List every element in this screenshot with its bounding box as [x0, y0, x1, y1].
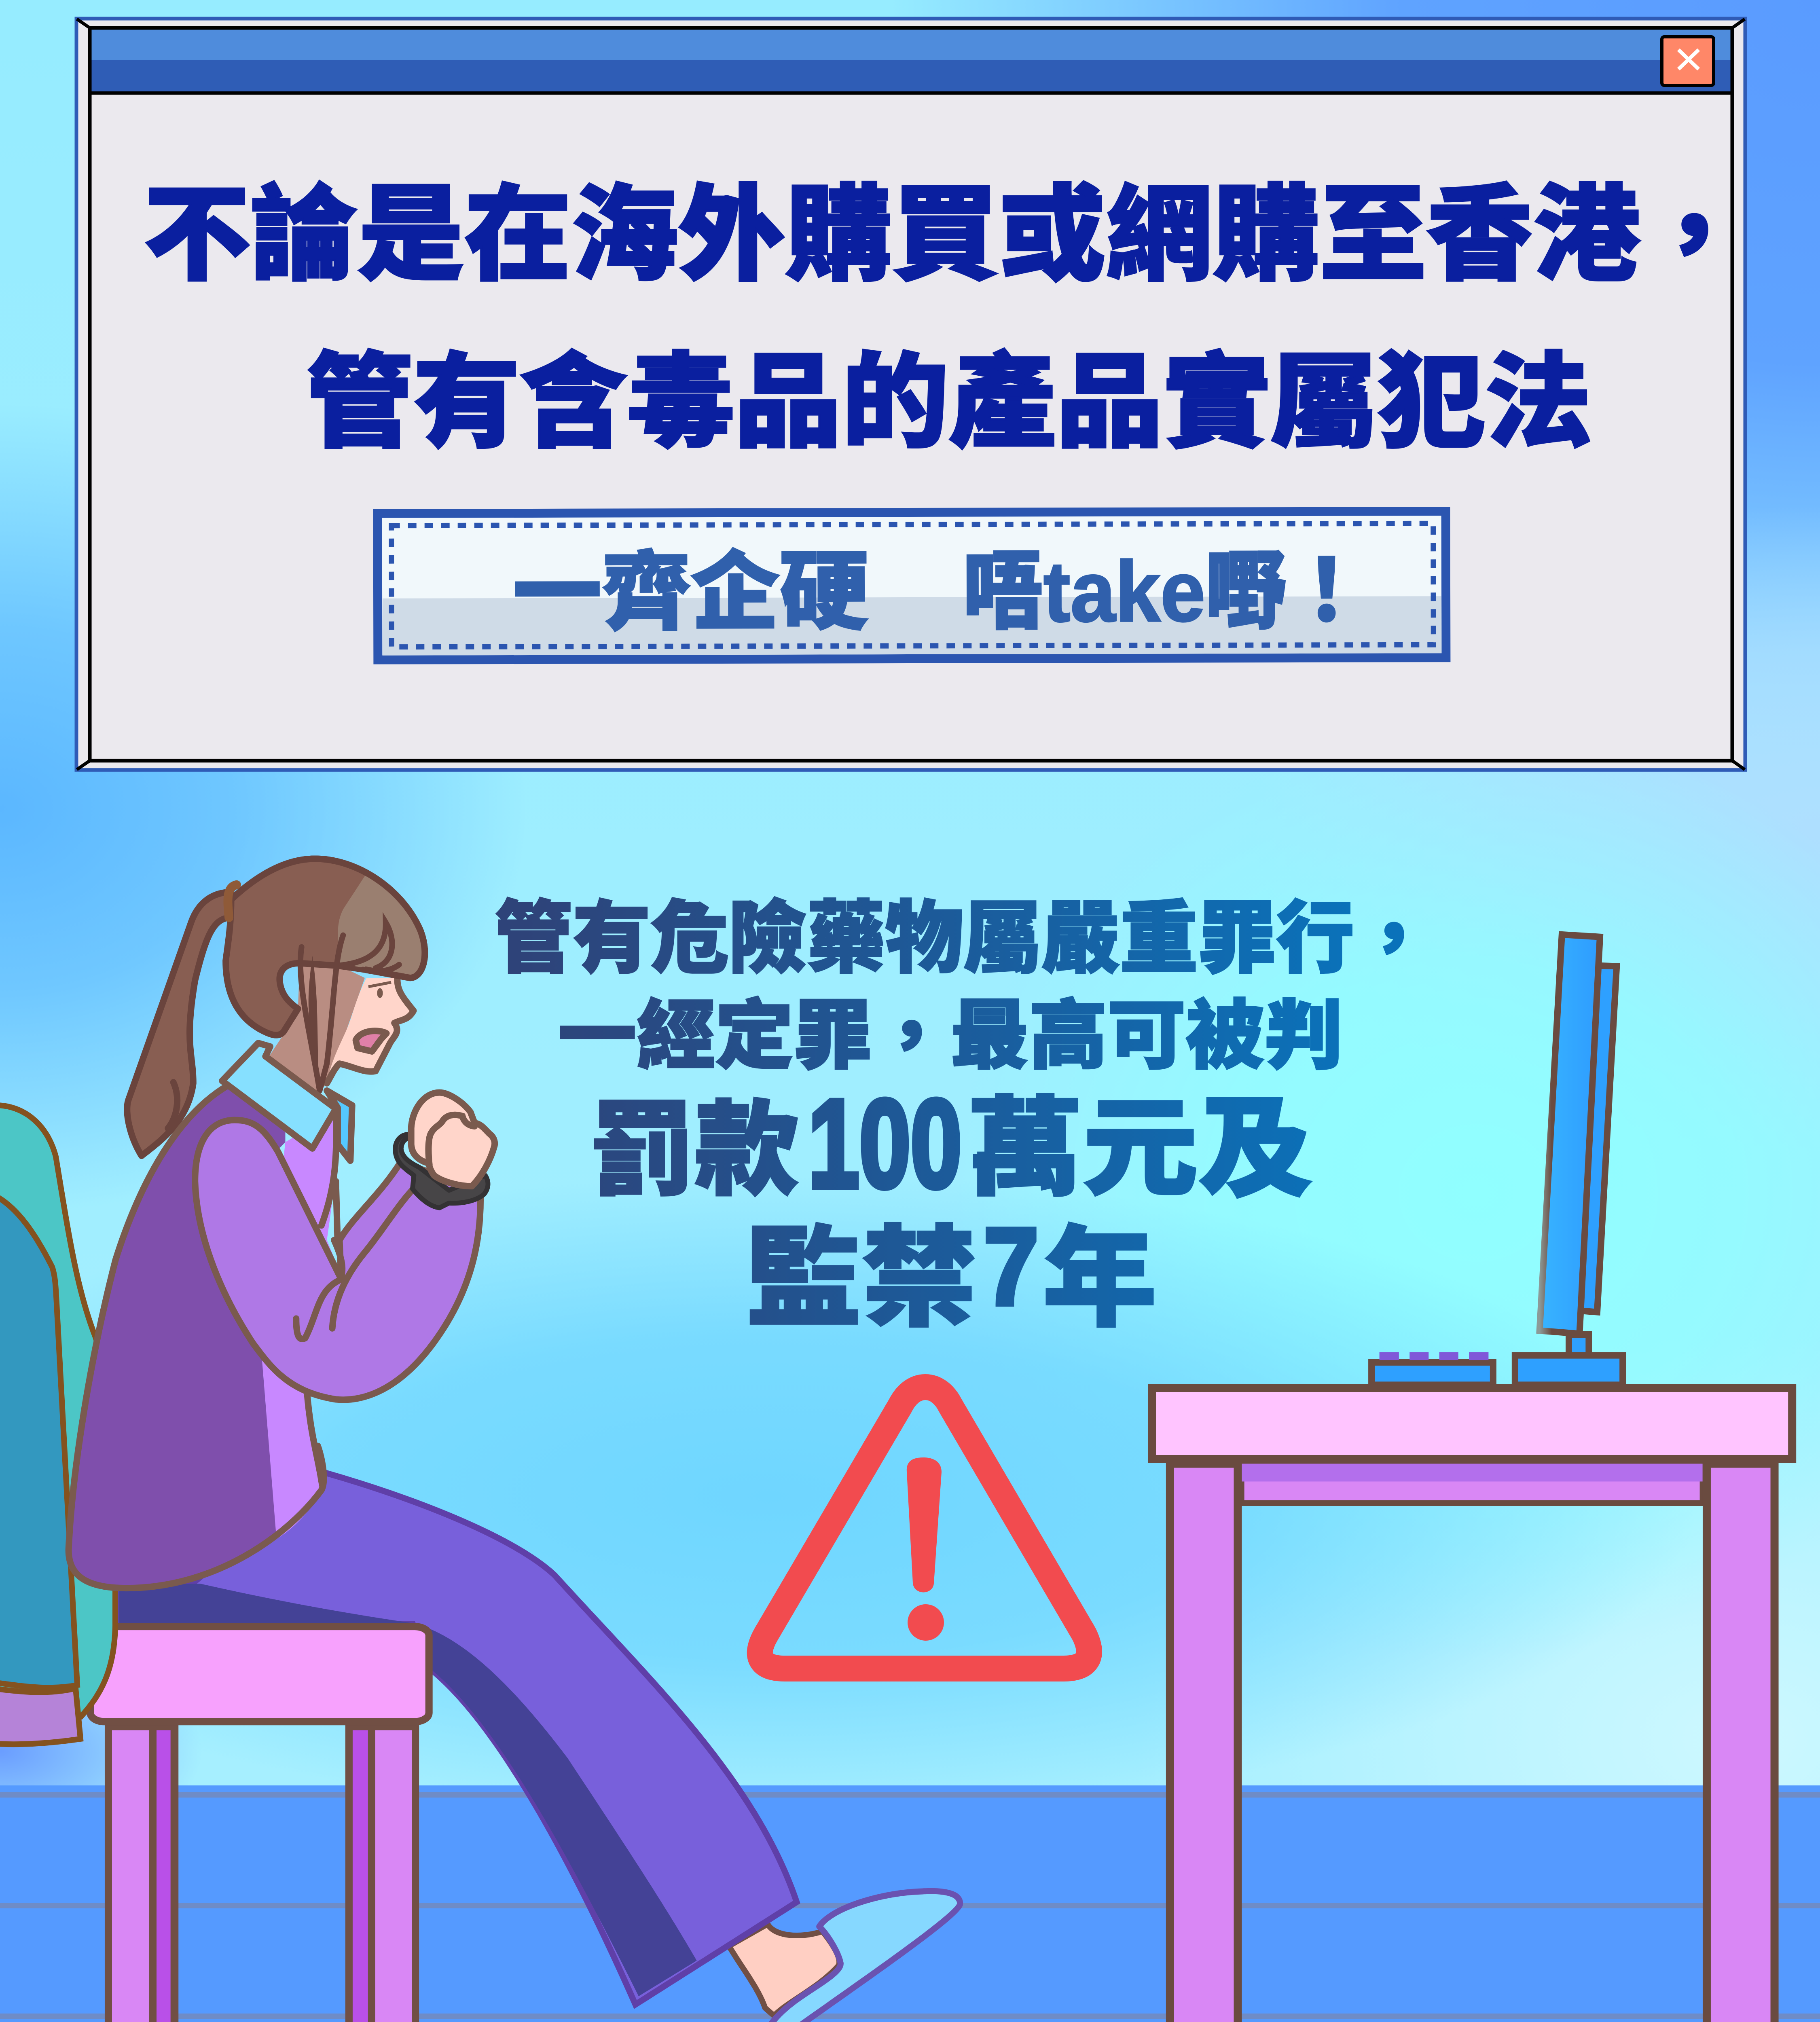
foot [729, 1924, 839, 2016]
stool [90, 1626, 429, 2022]
penalty line 4: 年 [1043, 1218, 1157, 1340]
sleeve [195, 1120, 480, 1400]
penalty line 3: 萬元及 [967, 1089, 1313, 1209]
desk apron [1242, 1464, 1703, 1503]
neck [269, 961, 365, 1093]
icon: warning triangle [760, 1387, 1089, 1669]
chair back [0, 1105, 115, 1717]
ponytail [127, 892, 231, 1156]
vest [69, 1086, 285, 1588]
penalty line 3 [590, 1073, 1313, 1214]
fist [411, 1093, 495, 1186]
shirt [262, 1113, 343, 1539]
collar [222, 1043, 336, 1148]
girl [69, 859, 480, 1588]
penalty line 3: 100 [808, 1073, 962, 1214]
close button [1662, 37, 1714, 85]
penalty line 2: 一經定罪，最高可被判 [558, 994, 1343, 1078]
window panel [76, 19, 1745, 770]
desk legs [1170, 1464, 1775, 2022]
slogan box [378, 511, 1446, 660]
slogan text: 一齊企硬 [513, 544, 869, 641]
penalty line 4: 7 [984, 1206, 1039, 1328]
chair cushion [0, 1196, 77, 1688]
hair strands [309, 956, 320, 1091]
slogan text: 唔take嘢！ [963, 543, 1367, 640]
slogan text [513, 543, 1367, 641]
computer monitor [1515, 935, 1623, 1385]
chair [0, 1105, 115, 1744]
face [327, 978, 413, 1083]
sleeve folds [296, 1189, 413, 1339]
stool seat [90, 1626, 429, 1722]
eye [368, 982, 391, 998]
foot and slipper [729, 1891, 960, 2022]
front hair highlight [338, 875, 425, 975]
penalty line 3: 罰款 [590, 1093, 799, 1208]
trousers [119, 1473, 797, 2005]
keyboard [1371, 1352, 1493, 1385]
desk [1152, 935, 1792, 2022]
penalty text [494, 895, 1433, 1340]
penalty line 4: 監禁 [746, 1218, 977, 1340]
inner collar [327, 1091, 352, 1161]
hair tie [228, 885, 237, 918]
slipper [763, 1891, 960, 2022]
floor [0, 1785, 1820, 2022]
window title bar [90, 30, 1732, 91]
desk top [1152, 1388, 1792, 1459]
penalty line 1: 管有危險藥物屬嚴重罪行， [494, 895, 1433, 983]
handcuffs and fist [395, 1093, 495, 1208]
heading line 2: 管有含毒品的產品實屬犯法 [306, 345, 1592, 460]
mouth [356, 1031, 387, 1051]
heading line 1: 不論是在海外購買或網購至香港， [144, 176, 1747, 293]
chair base [0, 1688, 80, 1744]
stool legs [108, 1726, 415, 2022]
hair [226, 859, 425, 1035]
handcuffs [395, 1134, 488, 1208]
penalty line 4 [746, 1206, 1157, 1340]
